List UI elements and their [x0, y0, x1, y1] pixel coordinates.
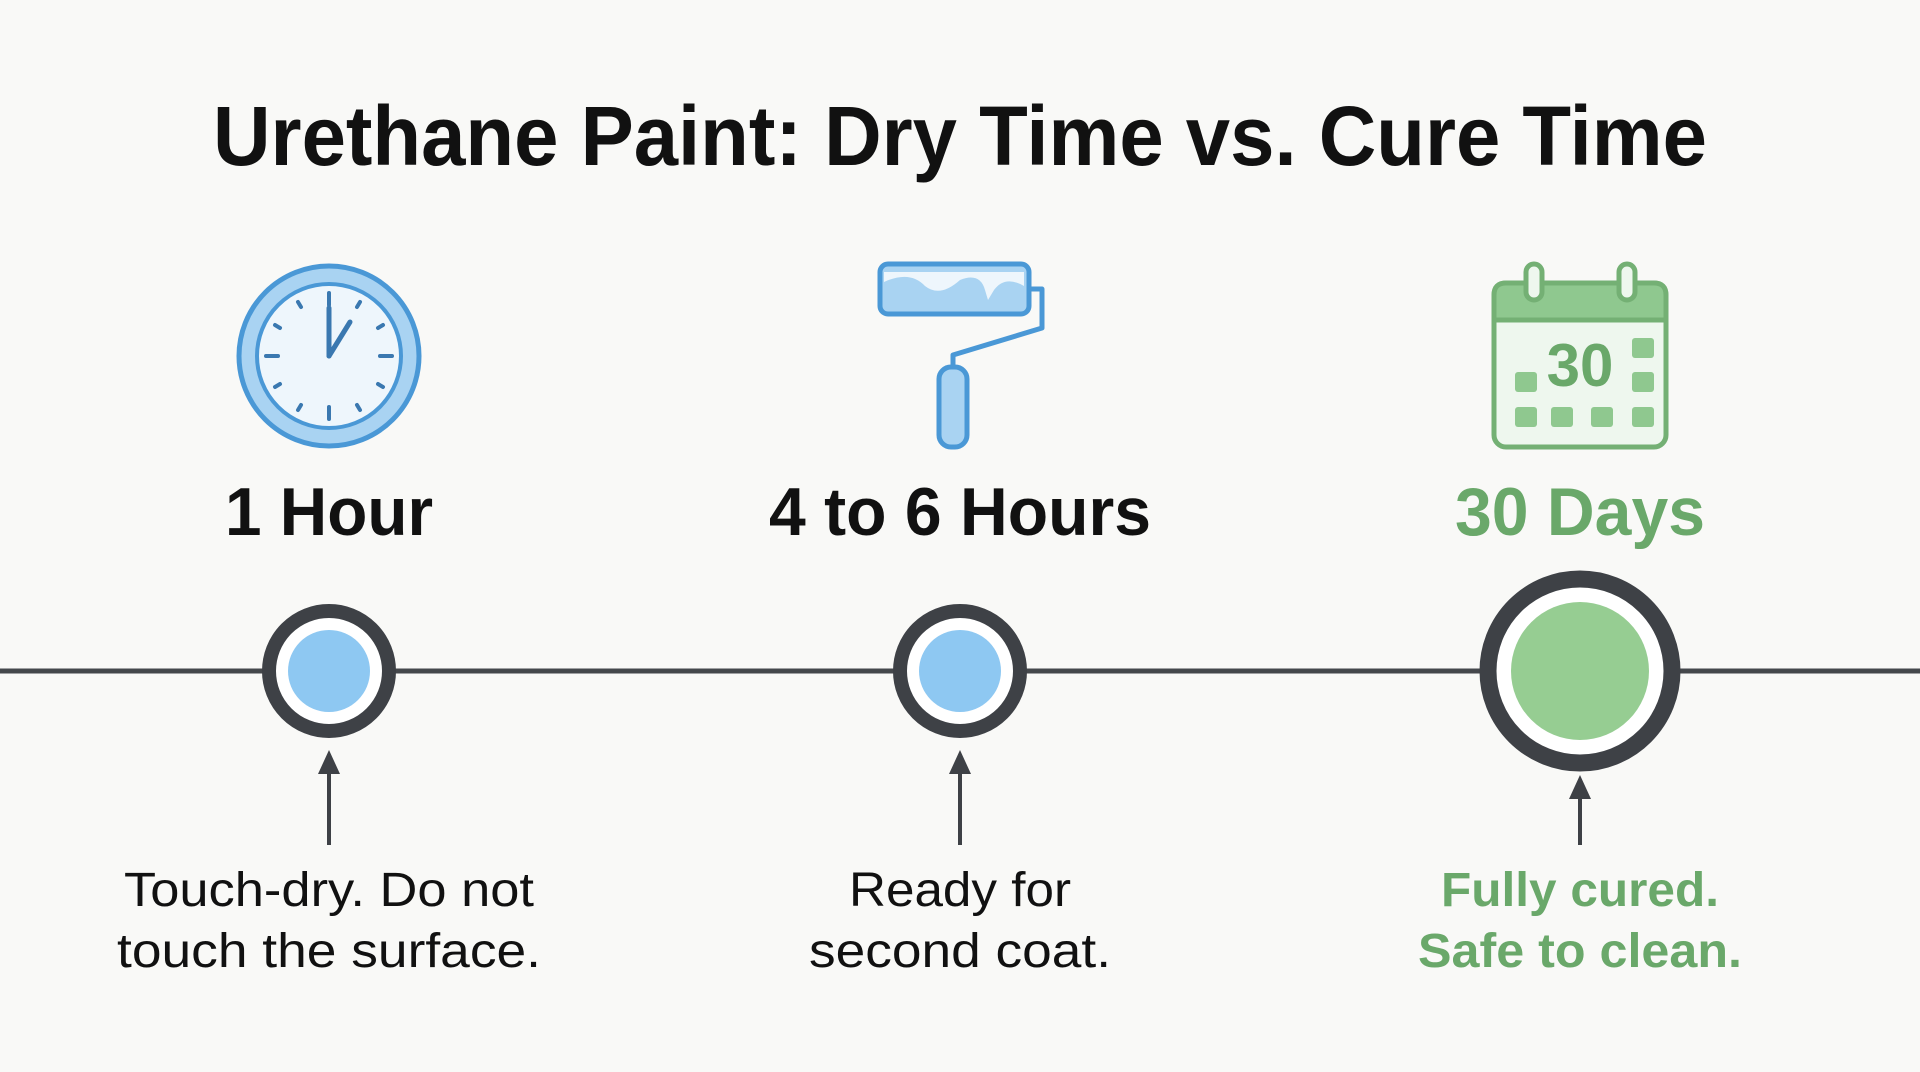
marker: 1 hour: [269, 611, 389, 731]
text: ready for second coat: Ready for: [849, 864, 1071, 917]
text: fully cured: [1418, 864, 1742, 978]
arrow 1: [318, 750, 340, 845]
icon: clock: [239, 266, 419, 446]
arrow 3: [1569, 775, 1591, 845]
title: Urethane Paint: Dry Time vs. Cure Time: [213, 89, 1707, 183]
icon: calendar: 30: [1547, 332, 1613, 399]
heading: 30 Days: 30 Days: [1455, 474, 1705, 550]
text: ready for second coat: second coat.: [809, 925, 1111, 978]
arrow 2: [949, 750, 971, 845]
marker: 30 days: [1488, 579, 1672, 763]
icon: paint roller: [880, 264, 1042, 447]
text: touch-dry: touch the surface.: [117, 925, 541, 978]
text: touch-dry: [117, 864, 541, 978]
icon: calendar: [1494, 264, 1666, 447]
marker: 4 to 6 hours: [900, 611, 1020, 731]
text: fully cured: Fully cured.: [1441, 864, 1719, 917]
text: fully cured: Safe to clean.: [1418, 925, 1742, 978]
timeline line: [0, 668, 1920, 674]
heading: 1 Hour: 1 Hour: [225, 474, 433, 550]
text: touch-dry: Touch-dry. Do not: [124, 864, 534, 917]
heading: 4 to 6 Hours: 4 to 6 Hours: [769, 474, 1151, 550]
text: ready for second coat: [809, 864, 1111, 978]
